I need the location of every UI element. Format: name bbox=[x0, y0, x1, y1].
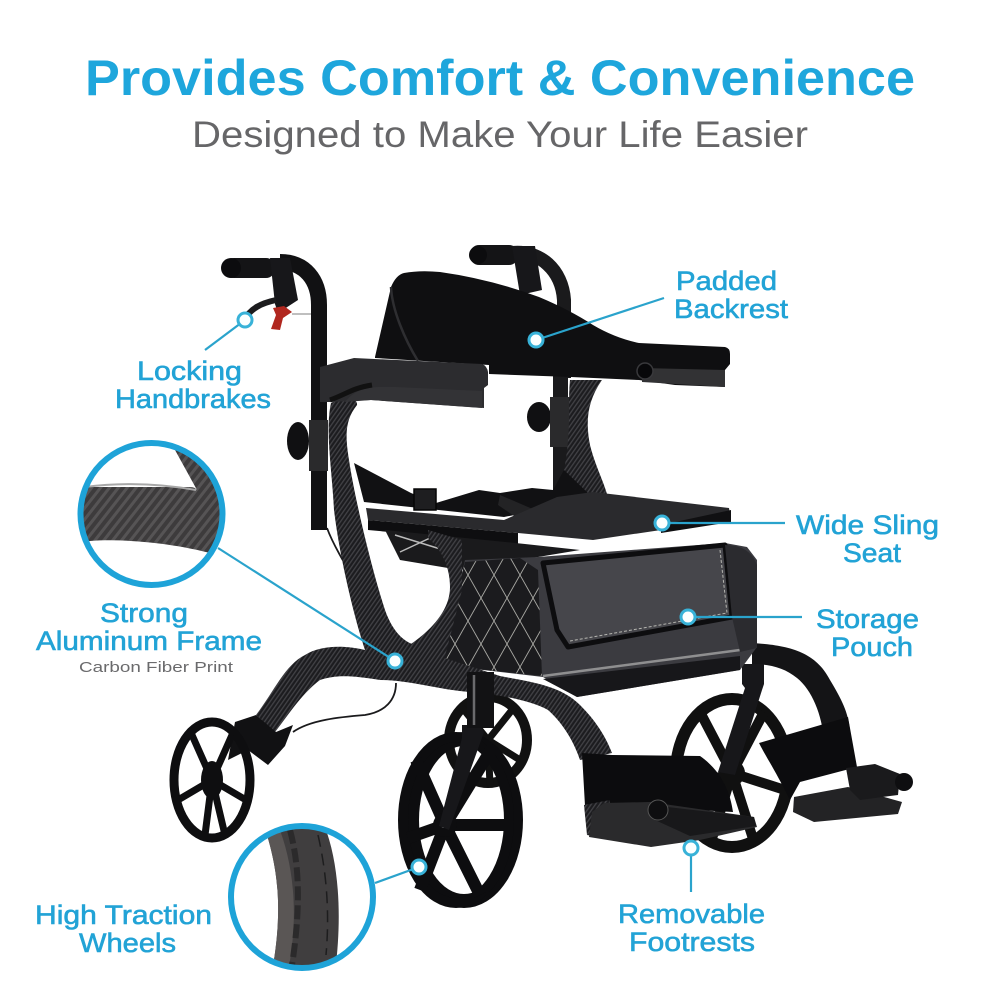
callout: wide sling seat: Wide Sling bbox=[796, 510, 939, 540]
callout: storage pouch: Storage bbox=[816, 604, 919, 634]
callout: removable footrests: Footrests bbox=[629, 927, 755, 957]
front fork and caster post bbox=[439, 672, 494, 830]
callout: wide sling seat bbox=[655, 510, 939, 568]
callout: storage pouch bbox=[681, 604, 919, 662]
callout: padded backrest bbox=[529, 266, 789, 347]
big right wheel bbox=[676, 699, 788, 847]
subtitle: Designed to Make Your Life Easier bbox=[192, 114, 808, 155]
front frame strut bbox=[408, 530, 462, 668]
title: Provides Comfort & Convenience bbox=[85, 50, 915, 106]
callout: wide sling seat: Seat bbox=[843, 538, 902, 568]
right handle bbox=[469, 245, 564, 378]
far back wheel bbox=[449, 697, 527, 785]
callout: strong aluminum frame: Aluminum Frame bbox=[36, 626, 262, 656]
front flap bbox=[543, 545, 732, 647]
pouch bottom stripe bbox=[543, 650, 740, 676]
right armrest knob bbox=[637, 363, 653, 379]
callout: high traction wheels: Wheels bbox=[79, 928, 176, 958]
rear caster wheel bbox=[174, 722, 250, 838]
callout: locking handbrakes: Handbrakes bbox=[115, 384, 271, 414]
right front fork bbox=[718, 664, 764, 775]
storage pouch bbox=[440, 543, 757, 697]
callout: high traction wheels: High Traction bbox=[35, 900, 212, 930]
callout: locking handbrakes bbox=[115, 313, 271, 414]
callout: high traction wheels bbox=[35, 820, 426, 972]
brake rod bbox=[292, 313, 311, 315]
flap stitching bbox=[570, 550, 727, 641]
callout: strong aluminum frame: Carbon Fiber Print bbox=[79, 659, 234, 676]
right footrest sling bbox=[759, 717, 857, 800]
rollator illustration bbox=[174, 245, 913, 903]
left armrest bbox=[320, 358, 488, 408]
callout: locking handbrakes: Locking bbox=[137, 356, 242, 386]
right rear frame arc bbox=[752, 643, 850, 740]
seat back straps bbox=[354, 463, 590, 520]
left armrest shading bbox=[345, 387, 482, 408]
main left frame bbox=[256, 398, 612, 760]
callout: removable footrests: Removable bbox=[618, 899, 765, 929]
front wheel bbox=[403, 737, 516, 903]
backrest side highlight bbox=[391, 287, 418, 361]
right armrest underside bbox=[642, 368, 725, 387]
callout: removable footrests bbox=[618, 841, 765, 957]
detail circle: tire tread bbox=[231, 820, 373, 972]
left brake lever bbox=[243, 300, 276, 322]
left footrest bbox=[582, 753, 757, 847]
right upper frame bbox=[552, 380, 607, 505]
callout: storage pouch: Pouch bbox=[831, 632, 913, 662]
callout: strong aluminum frame: Strong bbox=[100, 598, 188, 628]
wide sling seat bbox=[366, 492, 731, 544]
callout: strong aluminum frame bbox=[36, 443, 402, 676]
rear caster bracket bbox=[228, 715, 293, 765]
quilted side panel bbox=[440, 558, 542, 676]
left knob and clamp bbox=[287, 420, 328, 471]
brake cable bbox=[293, 528, 396, 732]
callout: padded backrest: Padded bbox=[676, 266, 777, 296]
callout: padded backrest: Backrest bbox=[674, 294, 789, 324]
detail circle: carbon fiber bbox=[70, 443, 230, 585]
under seat mechanism bbox=[385, 530, 580, 570]
left handle post bbox=[221, 258, 319, 530]
right upright post bbox=[527, 375, 570, 495]
padded backrest bbox=[375, 271, 730, 387]
right footplate and pin bbox=[793, 764, 913, 822]
red lock lever bbox=[271, 306, 292, 330]
